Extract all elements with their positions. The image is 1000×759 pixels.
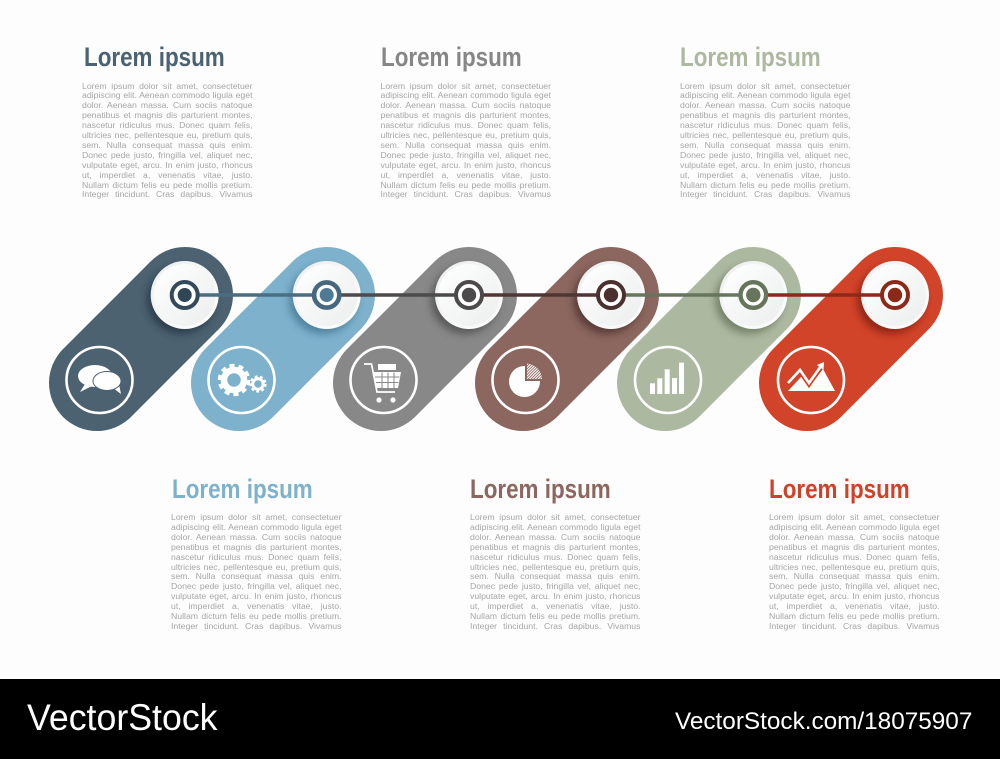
body text: column 3: ultricies nec, pellentesque eu, pretium quis, [680, 130, 850, 140]
node 1 [172, 282, 198, 308]
body text: column 1: sem. Nulla consequat massa quis enim. [82, 140, 252, 150]
step 2: gears capsule [208, 261, 361, 413]
body text: column 5: adipiscing elit. Aenean commodo ligula eget [470, 522, 640, 532]
brand wordmark: VectorStock [27, 697, 218, 738]
disc 4 [573, 261, 645, 334]
body text: column 3 [680, 80, 850, 199]
body text: column 5: Nullam dictum felis eu pede mollis pretium. [470, 611, 640, 621]
body text: column 1: dolor. Aenean massa. Cum sociis natoque [82, 100, 252, 110]
capsule 6 [807, 295, 895, 383]
body text: column 4: sem. Nulla consequat massa quis enim. [171, 571, 342, 581]
body text: column 6: ut, imperdiet a, venenatis vitae, justo. [769, 601, 940, 611]
body text: column 6: penatibus et magnis dis parturient montes, [769, 542, 940, 552]
body text: column 4: penatibus et magnis dis parturient montes, [171, 542, 342, 552]
node 5 [740, 282, 766, 308]
body text: column 6 [769, 512, 940, 631]
heading: column 5: Lorem ipsum [470, 474, 611, 504]
footer band [0, 679, 1000, 759]
disc 2 [289, 261, 361, 334]
body text: column 6: vulputate eget, arcu. In enim justo, rhoncus [769, 591, 940, 601]
body text: column 2: nascetur ridiculus mus. Donec quam felis, [380, 120, 551, 130]
body text: column 2: sem. Nulla consequat massa quis enim. [380, 140, 551, 150]
body text: column 2: Donec pede justo, fringilla vel, aliquet nec, [380, 150, 551, 160]
body text: column 6: Donec pede justo, fringilla vel, aliquet nec, [769, 581, 940, 591]
body text: column 4: Nullam dictum felis eu pede mollis pretium. [171, 611, 342, 621]
body text: column 4: dolor. Aenean massa. Cum sociis natoque [171, 532, 342, 542]
body text: column 5 [470, 512, 640, 631]
body text: column 6: Nullam dictum felis eu pede mollis pretium. [769, 611, 940, 621]
body text: column 5: penatibus et magnis dis parturient montes, [470, 542, 640, 552]
icon: pie chart [492, 347, 558, 413]
heading: column 3: Lorem ipsum [680, 42, 821, 72]
body text: column 1: penatibus et magnis dis parturient montes, [82, 110, 252, 120]
disc 3 [431, 261, 503, 334]
heading: column 6: Lorem ipsum [769, 474, 910, 504]
icon: mountain trend [778, 347, 844, 413]
body text: column 6: sem. Nulla consequat massa quis enim. [769, 571, 940, 581]
heading: column 4: Lorem ipsum [172, 474, 313, 504]
body text: column 1: adipiscing elit. Aenean commodo ligula eget [82, 90, 252, 100]
step 3: cart capsule [350, 261, 503, 413]
body text: column 6: dolor. Aenean massa. Cum sociis natoque [769, 532, 940, 542]
body text: column 1: vulputate eget, arcu. In enim justo, rhoncus [82, 160, 252, 170]
body text: column 4: nascetur ridiculus mus. Donec quam felis, [171, 552, 342, 562]
body text: column 6: nascetur ridiculus mus. Donec quam felis, [769, 552, 940, 562]
body text: column 1: Nullam dictum felis eu pede mollis pretium. [82, 180, 252, 190]
node 4 [598, 282, 624, 308]
body text: column 6: Lorem ipsum dolor sit amet, consectetuer [769, 512, 940, 522]
body text: column 6: Integer tincidunt. Cras dapibus. Vivamus [769, 621, 940, 631]
capsule 3 [381, 295, 469, 383]
step 6: mountain capsule [778, 261, 929, 413]
heading: column 2: Lorem ipsum [380, 42, 521, 72]
body text: column 5: Integer tincidunt. Cras dapibus. Vivamus [470, 621, 640, 631]
body text: column 3: Lorem ipsum dolor sit amet, consectetuer [680, 80, 850, 90]
body text: column 3: dolor. Aenean massa. Cum sociis natoque [680, 100, 850, 110]
body text: column 3: Integer tincidunt. Cras dapibus. Vivamus [680, 189, 850, 199]
capsule 5 [665, 295, 753, 383]
body text: column 1: Donec pede justo, fringilla vel, aliquet nec, [82, 150, 252, 160]
body text: column 2: adipiscing elit. Aenean commodo ligula eget [380, 90, 551, 100]
text block: column 4 [171, 474, 342, 631]
body text: column 1: ut, imperdiet a, venenatis vitae, justo. [82, 170, 252, 180]
node 2 [314, 282, 339, 308]
body text: column 1 [82, 80, 252, 199]
body text: column 3: Donec pede justo, fringilla vel, aliquet nec, [680, 150, 850, 160]
body text: column 3: nascetur ridiculus mus. Donec quam felis, [680, 120, 850, 130]
body text: column 4 [171, 512, 342, 631]
image reference url: VectorStock.com/18075907 [675, 708, 972, 735]
body text: column 3: Nullam dictum felis eu pede mollis pretium. [680, 180, 850, 190]
body text: column 2: vulputate eget, arcu. In enim justo, rhoncus [380, 160, 551, 170]
body text: column 6: adipiscing elit. Aenean commodo ligula eget [769, 522, 940, 532]
body text: column 6: ultricies nec, pellentesque eu, pretium quis, [769, 562, 940, 572]
disc 6 [857, 261, 929, 334]
body text: column 4: Integer tincidunt. Cras dapibus. Vivamus [171, 621, 342, 631]
body text: column 2: Integer tincidunt. Cras dapibus. Vivamus [380, 189, 551, 199]
body text: column 4: vulputate eget, arcu. In enim justo, rhoncus [171, 591, 342, 601]
body text: column 2: penatibus et magnis dis parturient montes, [380, 110, 551, 120]
icon: speech bubbles [66, 347, 132, 413]
text block: column 3 [680, 42, 850, 199]
body text: column 1: ultricies nec, pellentesque eu, pretium quis, [82, 130, 252, 140]
node 3 [456, 282, 482, 308]
body text: column 5: Lorem ipsum dolor sit amet, consectetuer [470, 512, 640, 522]
body text: column 3: ut, imperdiet a, venenatis vitae, justo. [680, 170, 850, 180]
body text: column 2: ut, imperdiet a, venenatis vitae, justo. [380, 170, 551, 180]
body text: column 2: Lorem ipsum dolor sit amet, consectetuer [380, 80, 551, 90]
text block: column 1 [82, 42, 252, 199]
body text: column 2: ultricies nec, pellentesque eu, pretium quis, [380, 130, 551, 140]
body text: column 4: adipiscing elit. Aenean commodo ligula eget [171, 522, 342, 532]
body text: column 5: ut, imperdiet a, venenatis vitae, justo. [470, 601, 640, 611]
body text: column 5: nascetur ridiculus mus. Donec quam felis, [470, 552, 640, 562]
body text: column 2 [380, 80, 551, 199]
body text: column 4: ultricies nec, pellentesque eu, pretium quis, [171, 562, 342, 572]
body text: column 1: Integer tincidunt. Cras dapibus. Vivamus [82, 189, 252, 199]
disc 5 [715, 261, 787, 334]
icon: gears [208, 347, 274, 413]
body text: column 4: Donec pede justo, fringilla vel, aliquet nec, [171, 581, 342, 591]
step 5: bars capsule [635, 261, 787, 413]
body text: column 2: dolor. Aenean massa. Cum sociis natoque [380, 100, 551, 110]
capsule 1 [97, 295, 185, 383]
body text: column 1: nascetur ridiculus mus. Donec quam felis, [82, 120, 252, 130]
body text: column 2: Nullam dictum felis eu pede mollis pretium. [380, 180, 551, 190]
body text: column 4: Lorem ipsum dolor sit amet, consectetuer [171, 512, 342, 522]
body text: column 3: vulputate eget, arcu. In enim justo, rhoncus [680, 160, 850, 170]
node 6 [882, 282, 908, 308]
body text: column 5: ultricies nec, pellentesque eu, pretium quis, [470, 562, 640, 572]
body text: column 5: sem. Nulla consequat massa quis enim. [470, 571, 640, 581]
body text: column 5: vulputate eget, arcu. In enim justo, rhoncus [470, 591, 640, 601]
step 4: pie capsule [492, 261, 645, 413]
disc 1 [147, 261, 219, 334]
text block: column 2 [380, 42, 551, 199]
connector line and nodes [172, 282, 908, 308]
step 1: speech capsule [66, 261, 219, 413]
body text: column 1: Lorem ipsum dolor sit amet, consectetuer [82, 80, 252, 90]
heading: column 1: Lorem ipsum [84, 42, 225, 72]
icon: bar chart [635, 347, 701, 413]
body text: column 4: ut, imperdiet a, venenatis vitae, justo. [171, 601, 342, 611]
capsule 4 [523, 295, 611, 383]
text block: column 5 [470, 474, 640, 631]
body text: column 3: penatibus et magnis dis parturient montes, [680, 110, 850, 120]
body text: column 3: adipiscing elit. Aenean commodo ligula eget [680, 90, 850, 100]
body text: column 3: sem. Nulla consequat massa quis enim. [680, 140, 850, 150]
body text: column 5: Donec pede justo, fringilla vel, aliquet nec, [470, 581, 640, 591]
capsule 2 [239, 295, 327, 383]
text block: column 6 [769, 474, 940, 631]
icon: shopping cart [350, 347, 416, 413]
body text: column 5: dolor. Aenean massa. Cum sociis natoque [470, 532, 640, 542]
